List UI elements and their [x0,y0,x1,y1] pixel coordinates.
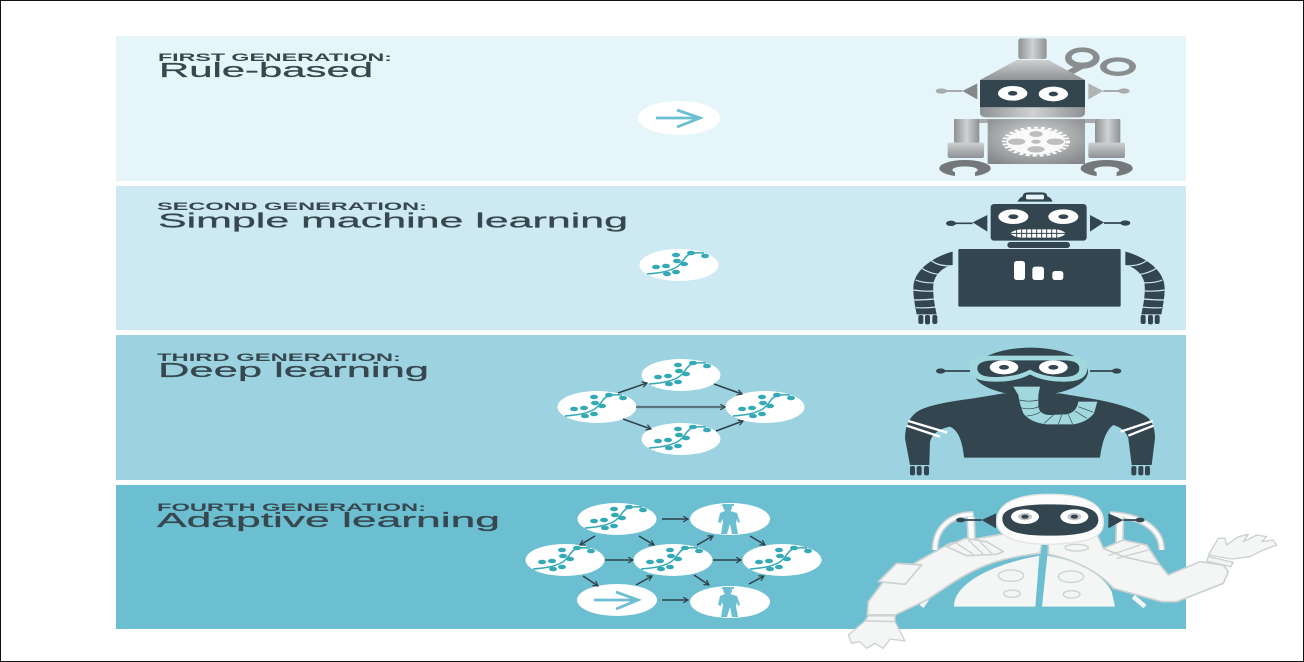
robot arm: left [913,252,953,324]
title: rule-based: Rule-based [159,60,373,82]
panel: third generation [116,335,1186,480]
title: deep learning: Deep learning [158,360,429,382]
astronaut right arm [1048,533,1277,602]
astronaut chest [954,556,1115,607]
heading: fourth generation: FOURTH GENERATION: [157,502,426,514]
robot: dark boxy robot [913,192,1165,324]
astronaut left arm [848,533,1042,648]
panel: fourth generation [116,485,1277,648]
robot: astronaut [848,494,1277,648]
robot: diver robot [905,348,1155,475]
icon: arrow in ellipse [638,101,720,135]
diagram: adaptive network [526,503,822,618]
heading: third generation: THIRD GENERATION: [157,352,401,364]
icon: scatter chart [640,249,718,281]
diagram: deep network [558,359,804,455]
robot: wind-up grey robot [936,38,1136,177]
panel: second generation [116,186,1186,330]
heading: second generation: SECOND GENERATION: [157,201,427,213]
robot arm: right [1125,252,1165,324]
title: adaptive learning: Adaptive learning [157,510,500,532]
heading: first generation: FIRST GENERATION: [158,52,392,64]
icon: gear [1004,128,1068,156]
title: simple machine learning: Simple machine learning [158,210,628,232]
panel: first generation [116,36,1186,181]
